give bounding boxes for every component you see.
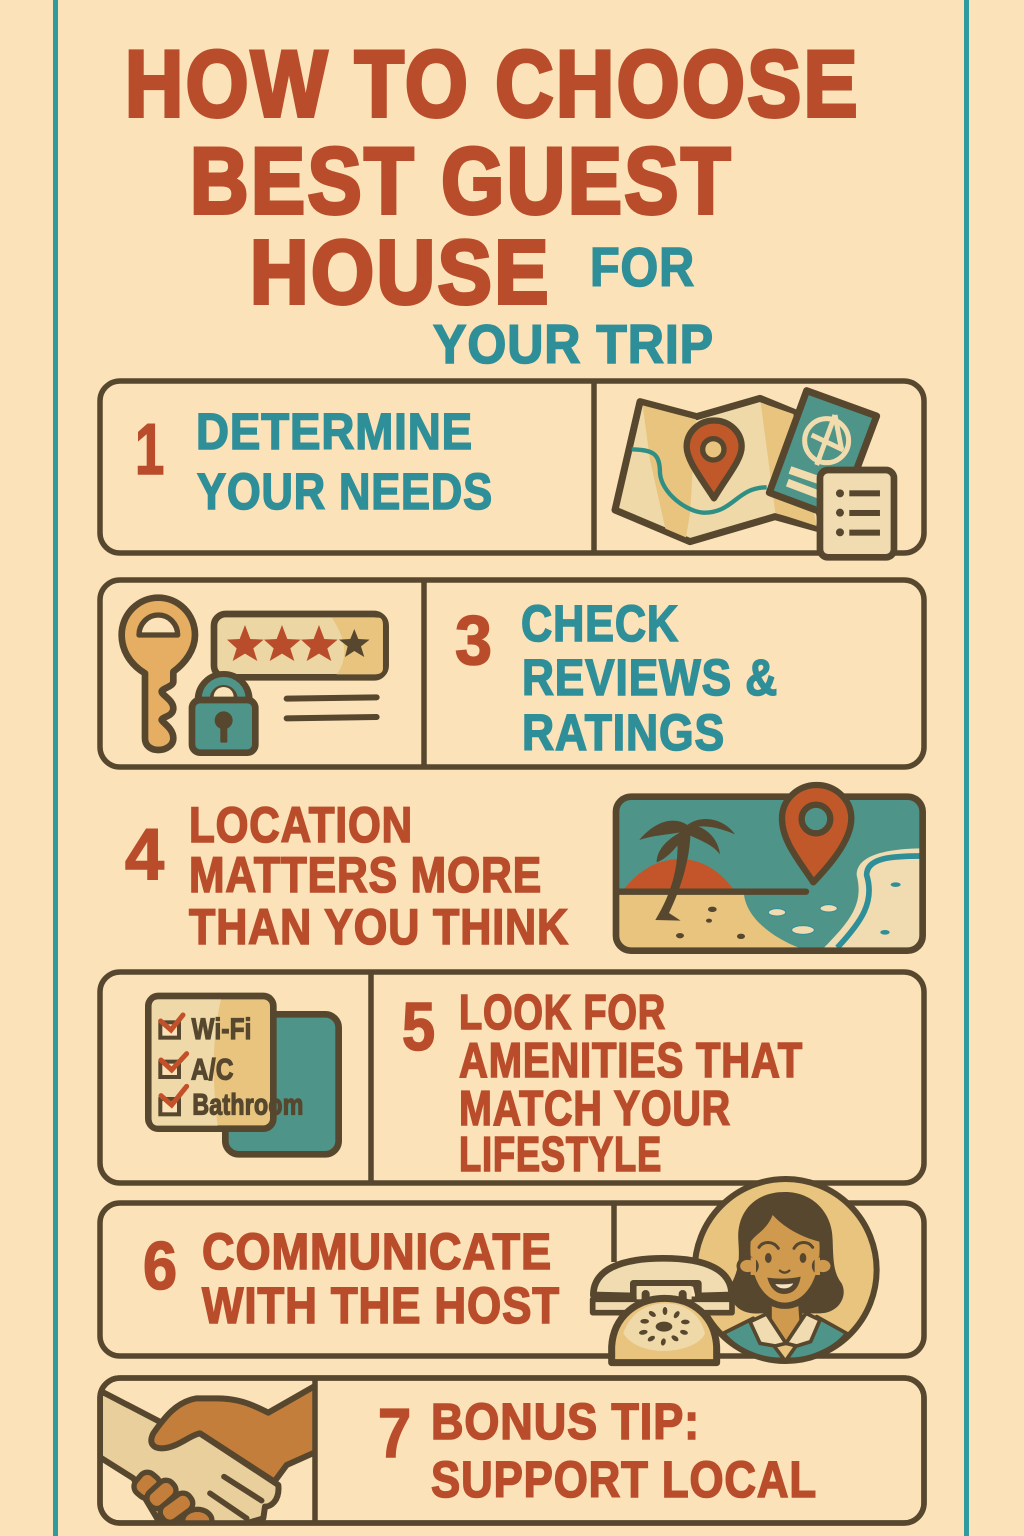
heading: look for amenities that match your lifestyle <box>459 986 803 1182</box>
icon: amenities checklist: Bathroom <box>192 1088 304 1121</box>
icon: amenities checklist: Wi-Fi <box>192 1013 252 1046</box>
heading: determine your needs <box>196 403 493 520</box>
icon: beach scene with location pin <box>616 785 923 951</box>
panel: step 1 determine your needs <box>100 381 924 557</box>
panel: step 6 communicate with the host <box>100 1179 924 1363</box>
title: HOUSE <box>250 223 551 323</box>
heading: bonus tip support local: SUPPORT LOCAL <box>431 1451 817 1508</box>
step number 3: 3 <box>455 601 493 679</box>
heading: determine your needs: DETERMINE <box>196 403 473 460</box>
heading: look for amenities that match your lifestyle: AMENITIES THAT <box>459 1034 803 1088</box>
step number 4: 4 <box>125 815 165 895</box>
title: YOUR TRIP <box>433 313 714 375</box>
heading: check reviews and ratings: REVIEWS & <box>522 649 778 706</box>
heading: check reviews and ratings: RATINGS <box>522 704 725 761</box>
title: BEST GUEST <box>190 128 733 233</box>
title: HOW TO CHOOSE <box>125 31 860 136</box>
title: FOR <box>590 236 695 298</box>
heading: look for amenities that match your lifestyle: MATCH YOUR <box>459 1082 731 1136</box>
icon: handshake <box>100 1385 317 1532</box>
heading: look for amenities that match your lifestyle: LIFESTYLE <box>459 1128 662 1182</box>
panel: step 7 bonus tip <box>100 1378 924 1532</box>
heading: communicate with the host: WITH THE HOST <box>202 1277 560 1334</box>
heading: bonus tip support local: BONUS TIP: <box>431 1393 700 1450</box>
heading: location matters more than you think: MATTERS MORE <box>189 847 542 903</box>
heading: location matters more than you think: LOCATION <box>189 797 413 853</box>
icon: amenities checklist: A/C <box>191 1053 234 1086</box>
icon: map, passport and checklist <box>615 391 894 557</box>
panel: step 5 amenities <box>100 972 924 1183</box>
heading: look for amenities that match your lifestyle: LOOK FOR <box>459 986 666 1040</box>
icon: amenities checklist <box>148 996 339 1154</box>
step number 5: 5 <box>402 989 436 1065</box>
heading: location matters more than you think <box>189 797 569 955</box>
heading: check reviews and ratings: CHECK <box>521 595 679 652</box>
heading: check reviews and ratings <box>521 595 778 761</box>
step number 1: 1 <box>135 410 165 490</box>
step number 7: 7 <box>378 1394 412 1472</box>
heading: bonus tip support local <box>431 1393 817 1508</box>
step number 6: 6 <box>143 1228 178 1304</box>
heading: location matters more than you think: THAN YOU THINK <box>189 899 569 955</box>
heading: communicate with the host <box>202 1223 560 1334</box>
title <box>125 31 860 375</box>
heading: communicate with the host: COMMUNICATE <box>202 1223 552 1280</box>
panel: step 4 location matters <box>125 785 923 955</box>
heading: determine your needs: YOUR NEEDS <box>197 463 493 520</box>
icon: host portrait and telephone <box>593 1179 877 1363</box>
icon: key, star rating and padlock <box>122 598 386 753</box>
panel: step 3 check reviews and ratings <box>100 580 924 767</box>
